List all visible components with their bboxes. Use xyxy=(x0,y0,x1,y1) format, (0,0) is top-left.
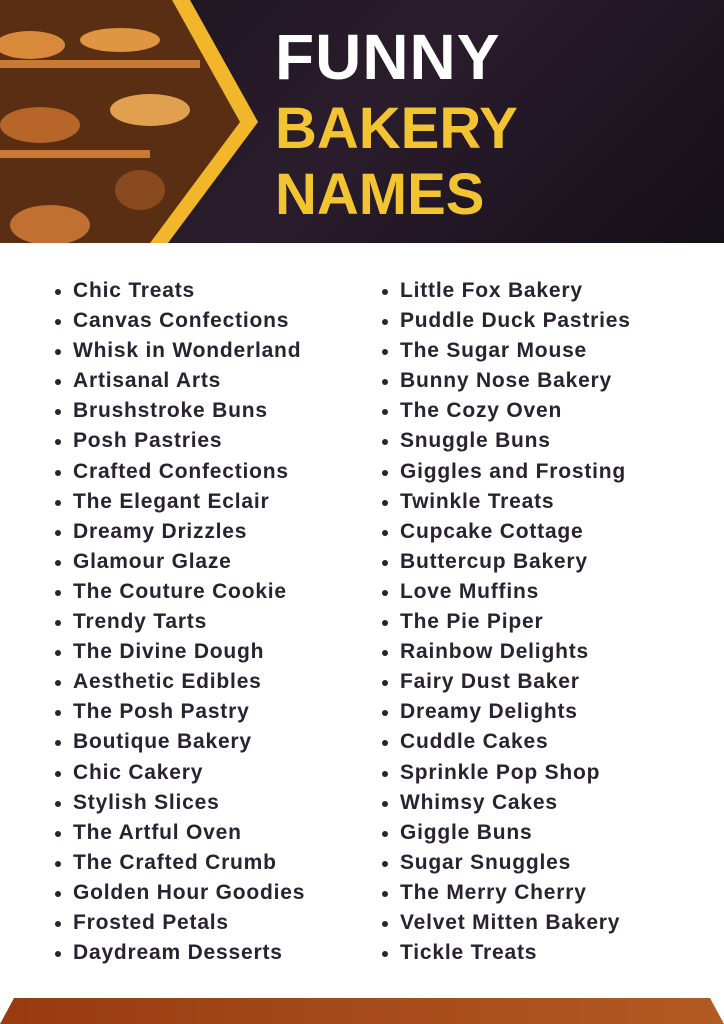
list: left column: The Crafted Crumb xyxy=(73,851,277,874)
list: left column: Golden Hour Goodies xyxy=(73,881,305,904)
list: left column: Dreamy Drizzles xyxy=(73,520,247,543)
list: right column: Sprinkle Pop Shop xyxy=(400,760,600,784)
list: right column: Velvet Mitten Bakery xyxy=(400,911,620,934)
list: right column xyxy=(382,279,631,964)
list: right column: Tickle Treats xyxy=(400,941,537,964)
header xyxy=(0,0,724,243)
list: right column: Whimsy Cakes xyxy=(400,791,558,814)
list: left column: The Divine Dough xyxy=(73,640,264,663)
list: left column: Boutique Bakery xyxy=(73,730,252,753)
list: right column: Buttercup Bakery xyxy=(400,550,588,573)
list: right column: Puddle Duck Pastries xyxy=(400,309,631,332)
list: right column: Twinkle Treats xyxy=(400,490,554,513)
list: right column: Cupcake Cottage xyxy=(400,520,584,543)
list: right column: Love Muffins xyxy=(400,580,539,603)
list: right column: Bunny Nose Bakery xyxy=(400,369,612,392)
list: left column: The Elegant Eclair xyxy=(73,490,269,513)
list: right column: Cuddle Cakes xyxy=(400,730,548,753)
footer bar xyxy=(0,998,724,1024)
list: right column: Giggle Buns xyxy=(400,821,532,844)
list: left column: Glamour Glaze xyxy=(73,550,232,573)
list: left column: The Artful Oven xyxy=(73,821,242,844)
list: right column: The Sugar Mouse xyxy=(400,339,587,362)
title xyxy=(275,21,518,227)
list: left column: Posh Pastries xyxy=(73,429,222,452)
list: right column: Little Fox Bakery xyxy=(400,279,583,302)
header: BAKERY xyxy=(275,96,518,161)
list: right column: Fairy Dust Baker xyxy=(400,670,580,693)
header: FUNNY xyxy=(275,21,500,93)
list: left column: Stylish Slices xyxy=(73,791,220,814)
list: left column: Artisanal Arts xyxy=(73,369,221,392)
list: right column: The Merry Cherry xyxy=(400,881,587,904)
list: left column: The Couture Cookie xyxy=(73,580,287,603)
list: left column: Frosted Petals xyxy=(73,911,229,934)
list: left column: Brushstroke Buns xyxy=(73,399,268,422)
list: right column: Sugar Snuggles xyxy=(400,851,571,874)
list: right column: Dreamy Delights xyxy=(400,700,578,723)
list: left column xyxy=(55,279,305,964)
list: right column: The Pie Piper xyxy=(400,610,543,633)
list: right column: The Cozy Oven xyxy=(400,399,562,422)
header: NAMES xyxy=(275,162,484,227)
list: left column: Aesthetic Edibles xyxy=(73,670,262,693)
list: right column: Snuggle Buns xyxy=(400,429,551,452)
list: left column: Daydream Desserts xyxy=(73,941,283,964)
list: left column: Trendy Tarts xyxy=(73,610,207,633)
list: right column: Rainbow Delights xyxy=(400,640,589,663)
list: left column: Chic Cakery xyxy=(73,760,203,784)
list: left column: Whisk in Wonderland xyxy=(73,339,301,362)
list: left column: The Posh Pastry xyxy=(73,700,250,723)
list: left column: Canvas Confections xyxy=(73,309,289,332)
list: right column: Giggles and Frosting xyxy=(400,460,626,483)
list: left column: Chic Treats xyxy=(73,279,195,302)
list: left column: Crafted Confections xyxy=(73,460,289,483)
header photo: bakery shelves xyxy=(0,0,258,243)
